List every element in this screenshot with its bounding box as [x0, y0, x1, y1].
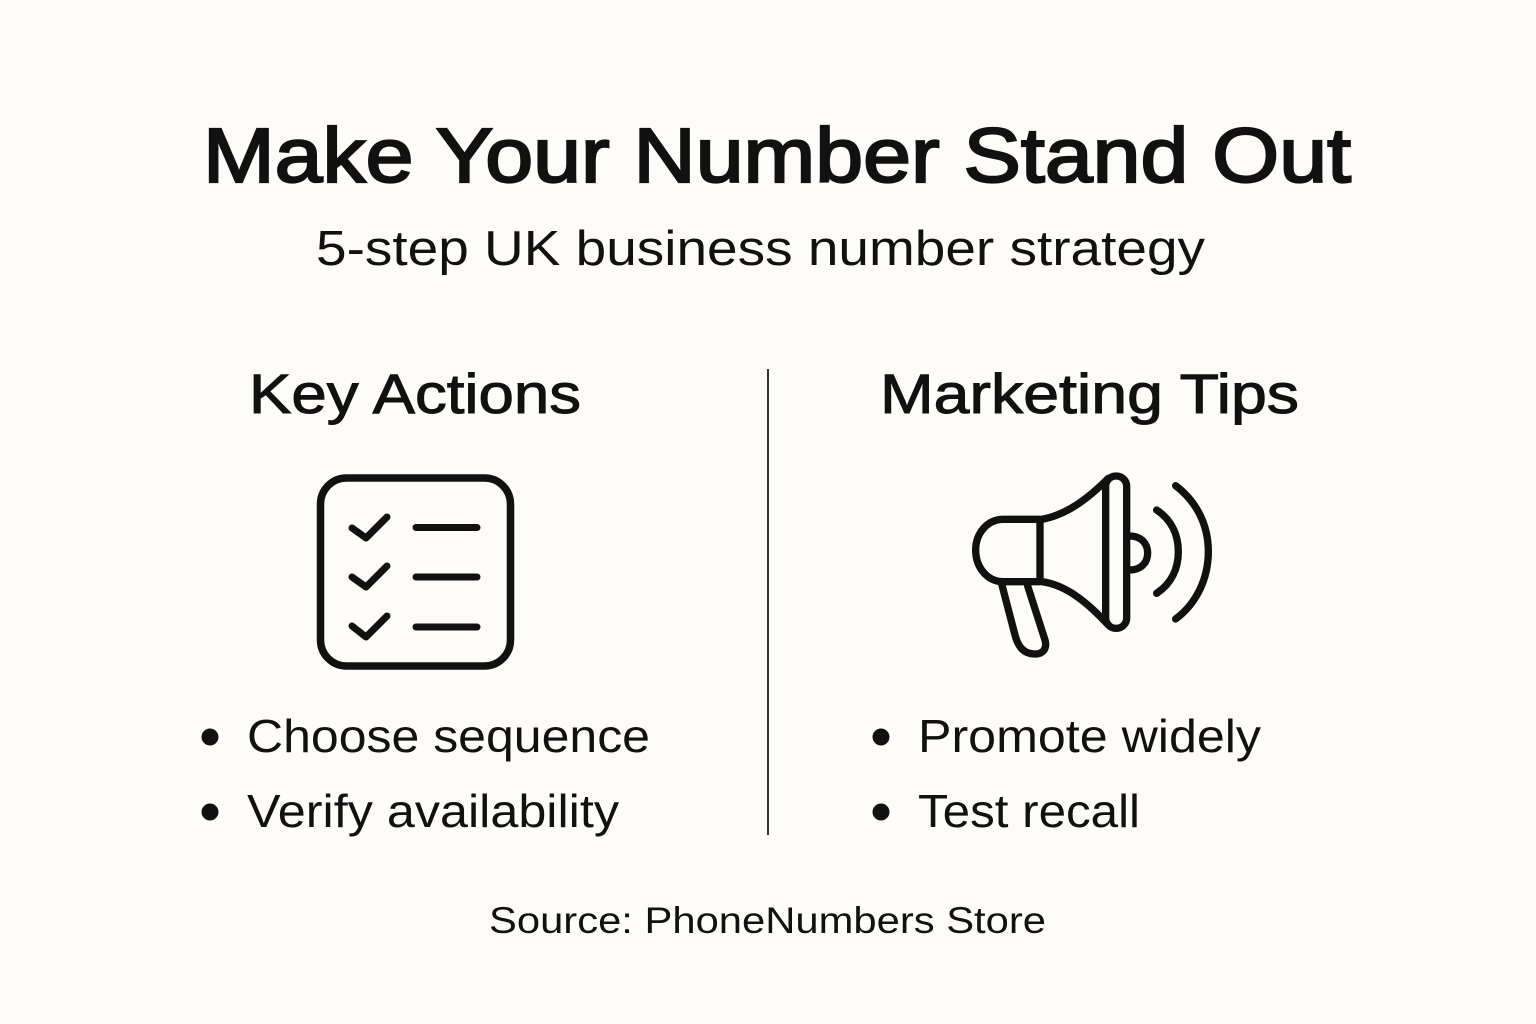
bullet list: marketing tips: [872, 710, 1261, 837]
bullet: promote widely: Promote widely: [918, 710, 1261, 762]
bullet: verify availability: Verify availability: [247, 785, 619, 837]
title: Make Your Number Stand Out: [203, 113, 1351, 199]
vertical divider: [767, 369, 769, 835]
source note: Source: PhoneNumbers Store: [489, 900, 1046, 941]
icon: checklist: [320, 478, 510, 666]
icon: megaphone: [976, 476, 1208, 654]
panel: key actions: [202, 362, 650, 837]
heading: key actions: Key Actions: [249, 362, 581, 425]
bullet: test recall: Test recall: [918, 785, 1140, 837]
heading: marketing tips: Marketing Tips: [880, 362, 1299, 425]
bullet list: key actions: [202, 710, 650, 837]
subtitle: 5-step UK business number strategy: [316, 222, 1206, 276]
panel: marketing tips: [872, 362, 1299, 837]
bullet: choose sequence: Choose sequence: [247, 710, 650, 762]
